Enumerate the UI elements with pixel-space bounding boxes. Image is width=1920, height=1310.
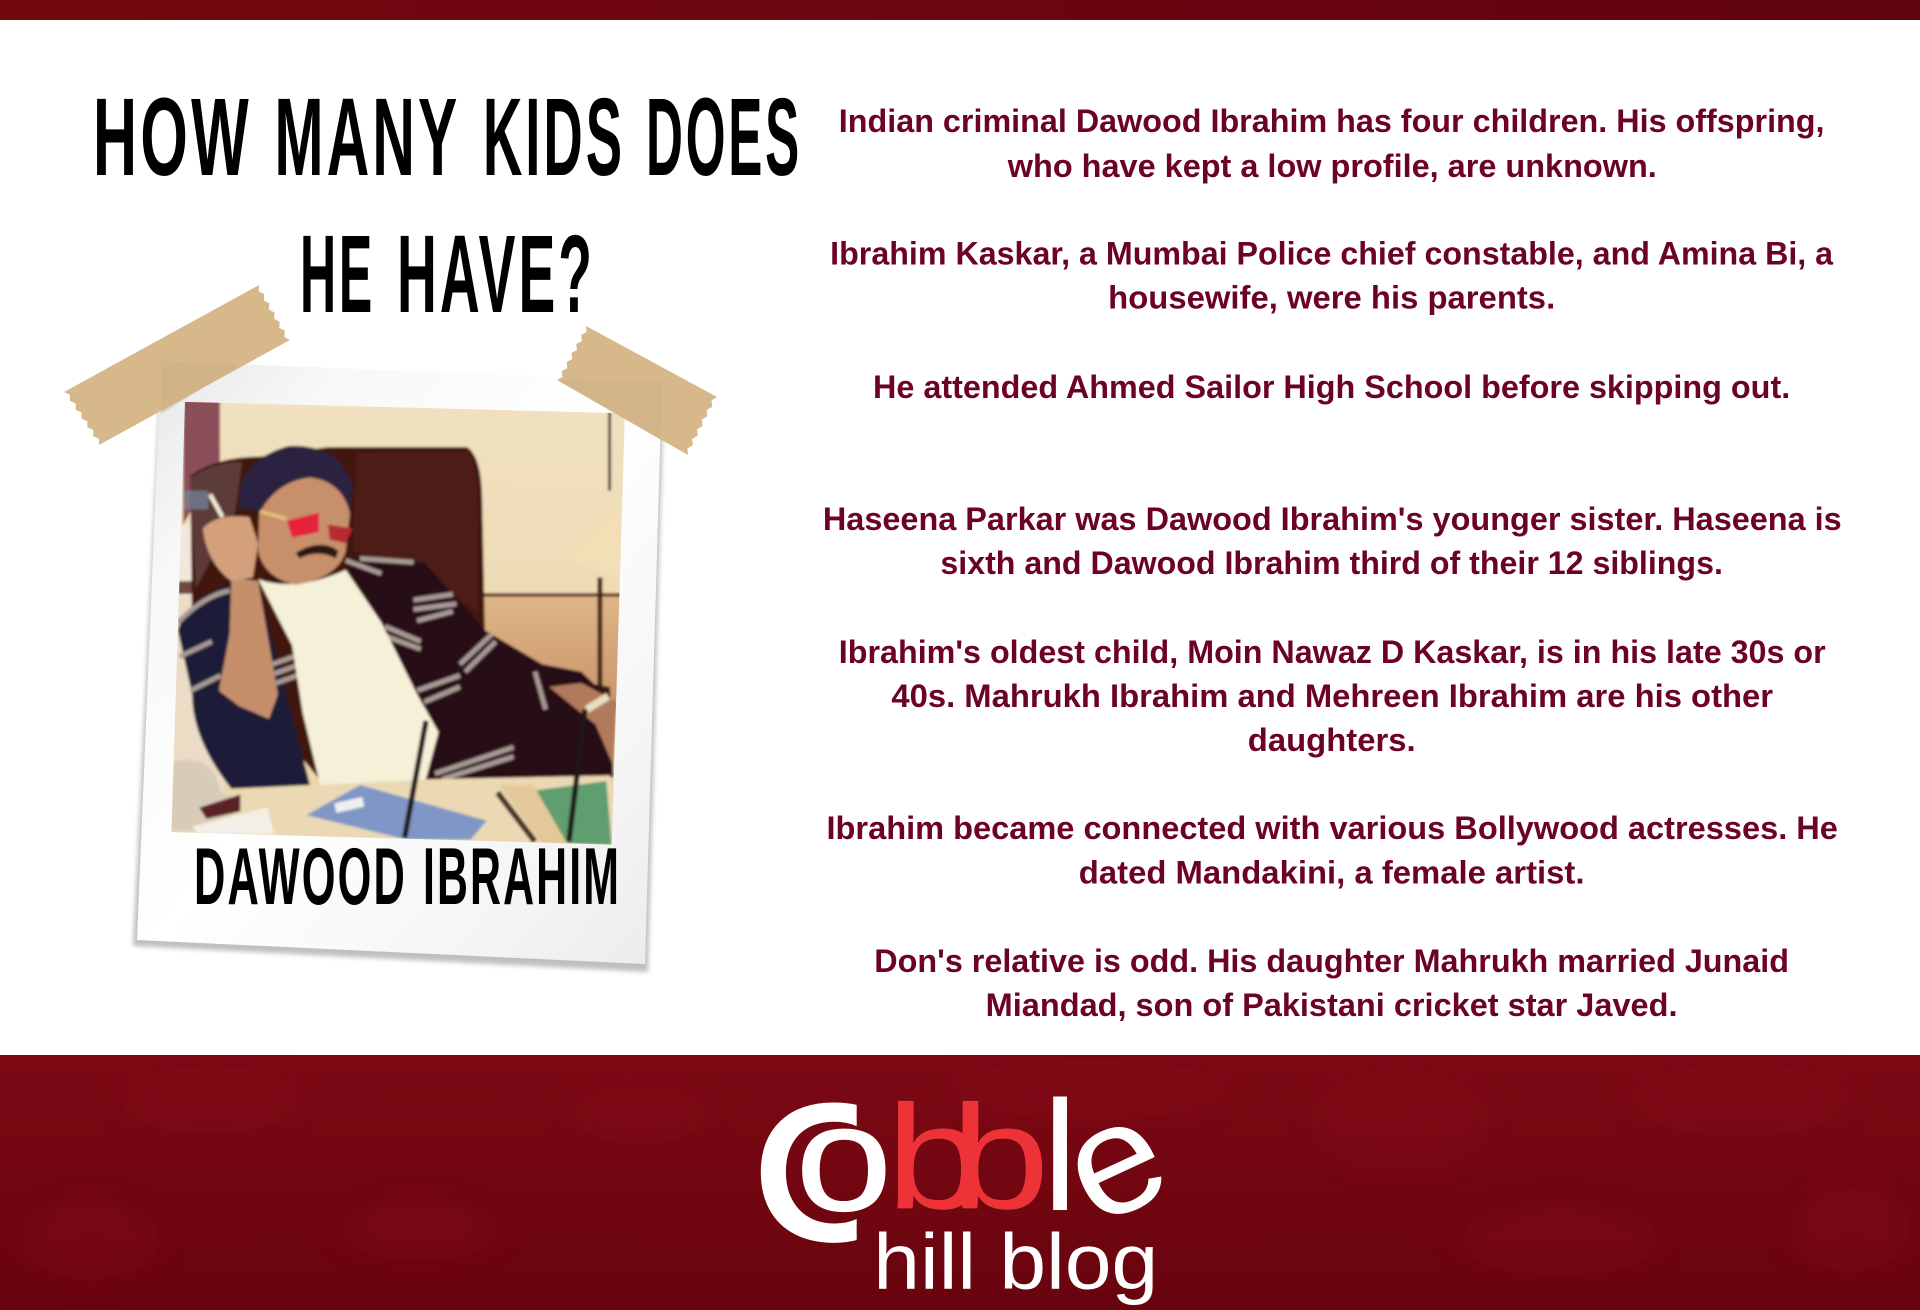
desk bbox=[167, 776, 617, 845]
paragraph: Bollywood bbox=[826, 810, 1838, 890]
left arm and hand bbox=[219, 577, 278, 719]
leather chair bbox=[190, 447, 614, 785]
paragraph: relative: Miandad, son of Pakistani cricket star Javed. bbox=[986, 987, 1678, 1023]
body text bbox=[823, 103, 1842, 1023]
cigarette bbox=[210, 494, 222, 517]
pens on stands bbox=[405, 721, 426, 838]
head bbox=[258, 477, 350, 585]
logo: Cobble hill blog bbox=[760, 1096, 1162, 1305]
tape: left bbox=[64, 285, 290, 445]
paragraph: school: He attended Ahmed Sailor High School before skipping out. bbox=[873, 369, 1790, 405]
paragraph: relative bbox=[874, 943, 1789, 1023]
moustache bbox=[296, 545, 339, 559]
paragraph: oldest child bbox=[839, 634, 1826, 758]
right forearm bbox=[549, 683, 617, 766]
top bar bbox=[0, 0, 1920, 20]
paragraph: oldest child: 40s. Mahrukh Ibrahim and Mehreen Ibrahim are his other bbox=[891, 678, 1773, 714]
paragraph: sister: sixth and Dawood Ibrahim third of their 12 siblings. bbox=[940, 545, 1723, 581]
paragraph: oldest child: Ibrahim's oldest child, Moin Nawaz D Kaskar, is in his late 30s or bbox=[839, 634, 1826, 670]
logo letter o: o bbox=[796, 1075, 892, 1242]
sunglasses bbox=[260, 511, 287, 519]
title: HE bbox=[300, 213, 375, 336]
logo subline: hill blog bbox=[873, 1217, 1158, 1305]
paragraph: parents bbox=[830, 236, 1833, 316]
paragraph: sister: Haseena Parkar was Dawood Ibrahim's younger sister. Haseena is bbox=[823, 501, 1842, 537]
logo letters bb: b bbox=[886, 1074, 985, 1240]
paragraph: children bbox=[839, 103, 1824, 184]
polaroid photo card bbox=[133, 361, 664, 972]
backdrop lower left bbox=[174, 596, 226, 790]
paragraph: Bollywood: Ibrahim became connected with various Bollywood actresses. He bbox=[826, 810, 1838, 846]
logo letter l: l bbox=[1043, 1069, 1077, 1244]
logo letter C: C bbox=[753, 1066, 905, 1280]
blue notebook bbox=[306, 785, 487, 840]
paragraph: children: Indian criminal Dawood Ibrahim has four children. His offspring, bbox=[839, 103, 1824, 139]
name caption: IBRAHIM bbox=[423, 832, 621, 922]
paragraph: children: who have kept a low profile, are unknown. bbox=[1007, 148, 1657, 184]
title: KIDS bbox=[483, 76, 625, 199]
paragraph: parents: Ibrahim Kaskar, a Mumbai Police chief constable, and Amina Bi, a bbox=[830, 236, 1833, 272]
photograph of Dawood Ibrahim bbox=[164, 400, 635, 853]
paragraph: Bollywood: dated Mandakini, a female artist. bbox=[1079, 854, 1585, 890]
green notebook bbox=[533, 781, 612, 845]
logo letters bb bbox=[886, 1074, 1050, 1240]
paragraph: parents: housewife, were his parents. bbox=[1108, 280, 1555, 316]
title bbox=[93, 76, 802, 336]
title: HOW bbox=[93, 76, 252, 199]
card paper bbox=[137, 361, 662, 964]
card shadow bbox=[133, 366, 664, 972]
paragraph: oldest child: daughters. bbox=[1248, 722, 1416, 758]
footer band bbox=[0, 1055, 1920, 1310]
t-shirt bbox=[258, 570, 439, 787]
logo letter e: e bbox=[1035, 1061, 1192, 1258]
jacket bbox=[178, 585, 310, 789]
title: HAVE? bbox=[397, 213, 595, 336]
logo letters bb: b bbox=[951, 1074, 1050, 1240]
paragraph: sister bbox=[823, 501, 1842, 581]
title: MANY bbox=[274, 76, 460, 199]
text: DOES bbox=[646, 76, 802, 199]
name caption: DAWOOD bbox=[194, 832, 407, 922]
paragraph: relative: Don's relative is odd. His daughter Mahrukh married Junaid bbox=[874, 943, 1789, 979]
plate and papers bbox=[172, 760, 230, 830]
tape: right bbox=[557, 326, 717, 455]
